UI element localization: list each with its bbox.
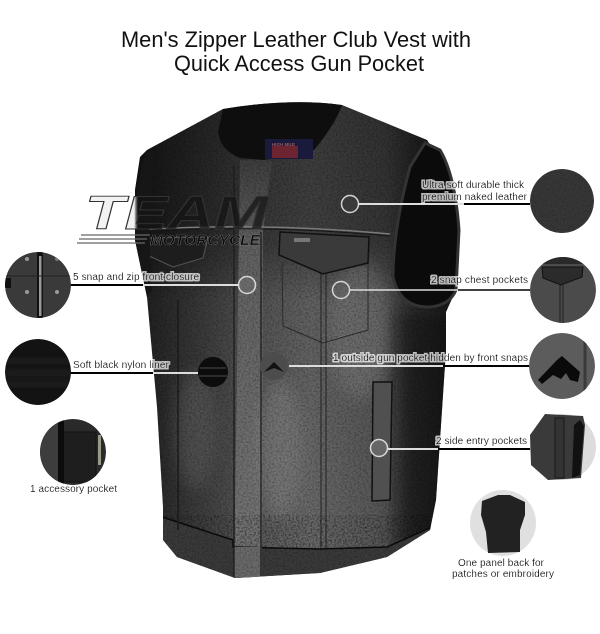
label: premium leather — [422, 180, 528, 203]
vest details — [135, 102, 452, 578]
label: premium leather: Ultra soft durable thick — [422, 180, 525, 191]
label: premium leather: premium naked leather — [422, 192, 528, 203]
leader: gun pocket — [260, 352, 530, 380]
leader: premium leather — [342, 196, 530, 212]
side pocket — [372, 382, 392, 501]
thumbnail: leather — [530, 169, 594, 233]
label: back panel — [452, 558, 554, 580]
thumbnail: gun — [529, 333, 595, 400]
title: Men's Zipper Leather Club Vest with — [121, 27, 471, 52]
leader: chest pockets — [332, 282, 530, 298]
vest body — [135, 102, 456, 578]
thumbnail: accessory pocket — [40, 419, 106, 486]
thumbnail: back panel — [470, 490, 536, 556]
label: front closure: 5 snap and zip front closure — [73, 272, 199, 283]
label: nylon liner: Soft black nylon liner — [73, 360, 170, 371]
vest photo — [120, 95, 460, 590]
thumbnail: zip closure — [5, 252, 71, 318]
label: chest pockets: 2 snap chest pockets — [431, 275, 528, 286]
placket — [234, 160, 272, 580]
title — [121, 27, 471, 76]
label: gun pocket: 1 outside gun pocket hidden by front snaps — [333, 353, 528, 364]
right arm opening — [393, 143, 459, 307]
watermark logo: MOTORCYCLE — [150, 232, 261, 249]
label: back panel: One panel back for — [458, 558, 545, 569]
leader: front closure — [70, 276, 256, 294]
hem band — [163, 518, 430, 578]
left chest flap — [146, 237, 208, 267]
collar label — [265, 139, 313, 159]
thumbnail: side pocket — [530, 414, 596, 480]
label: accessory pocket: 1 accessory pocket — [30, 484, 117, 495]
vest details: HIGH MILE — [272, 142, 295, 147]
chest pocket stitching — [282, 262, 368, 343]
chest pocket flap — [279, 232, 369, 274]
neck lining — [218, 101, 342, 160]
thumbnail: nylon liner — [5, 339, 72, 405]
watermark logo — [77, 186, 269, 249]
left arm shade — [135, 150, 155, 297]
leader: nylon liner — [70, 357, 228, 387]
thumbnail: chest pocket — [530, 257, 596, 323]
leader: side pockets — [370, 440, 530, 456]
yoke seam — [138, 227, 390, 234]
label: side pockets: 2 side entry pockets — [436, 436, 527, 447]
watermark logo: TEAM — [85, 186, 269, 239]
title: Quick Access Gun Pocket — [174, 51, 424, 76]
label: back panel: patches or embroidery — [452, 569, 554, 580]
